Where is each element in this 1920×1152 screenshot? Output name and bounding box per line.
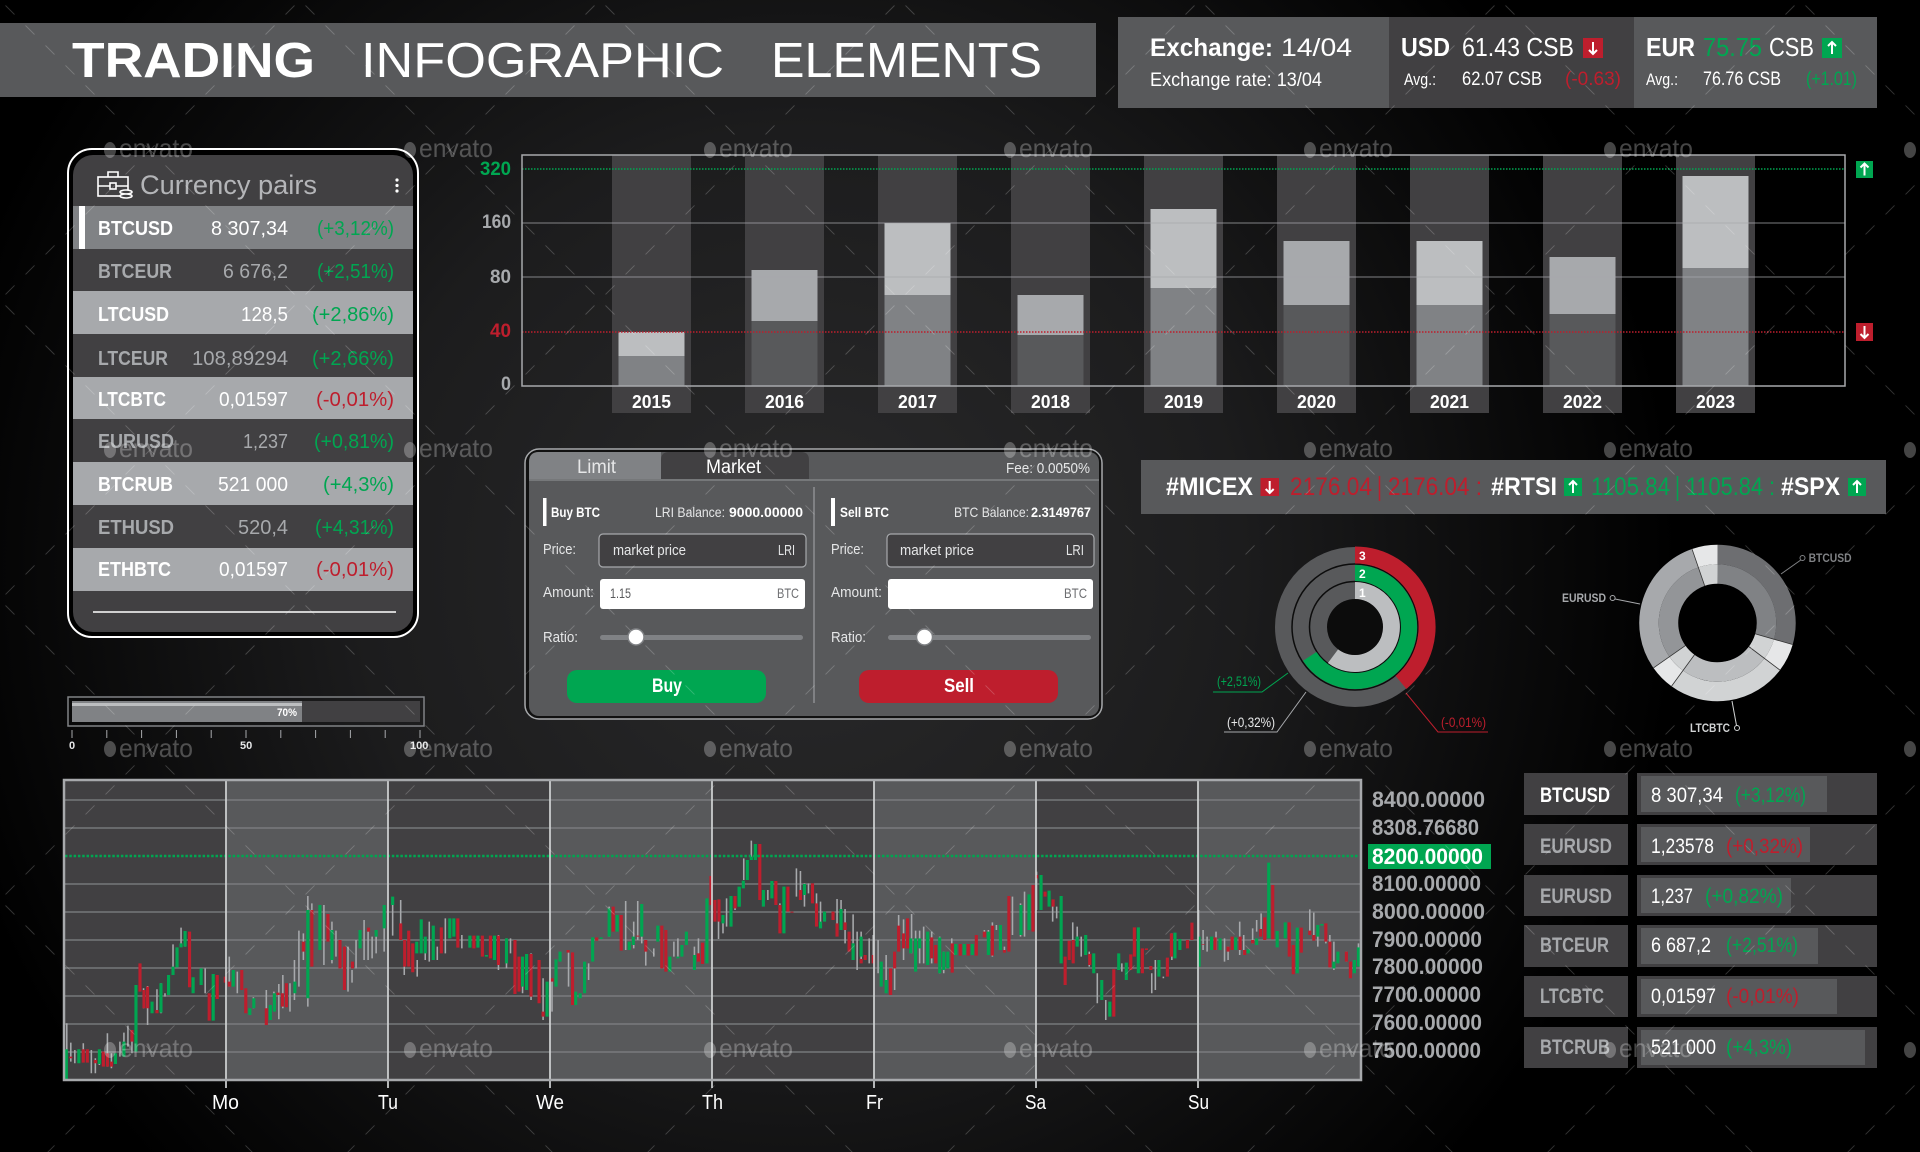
row: BTCEUR: BTCEUR [98, 261, 172, 283]
ring numbers: 2 [1359, 567, 1366, 581]
panel heading: Currency pairs [140, 170, 317, 200]
year labels: 2015 [632, 392, 671, 412]
tab: Market [661, 452, 809, 479]
row: LTCEUR: (+2,66%) [312, 348, 394, 370]
row: LTCUSD: 128,5 [241, 304, 288, 326]
year labels: 2023 [1696, 392, 1735, 412]
title text: INFOGRAPHIC [361, 34, 724, 88]
quote: BTCEUR [1524, 925, 1877, 967]
row: LTCUSD [73, 291, 413, 334]
row: LTCEUR: 108,89294 [192, 348, 288, 370]
sell button [859, 670, 1058, 703]
panel: exchange rates [1118, 17, 1877, 108]
quote: BTCUSD: BTCUSD [1540, 784, 1610, 807]
day labels: Su [1188, 1092, 1209, 1114]
icon: up marker [1856, 161, 1873, 178]
sell form: market price [900, 542, 974, 559]
watermarks: envato: envato [1019, 733, 1093, 763]
day labels: Mo [212, 1092, 239, 1114]
row: BTCRUB: BTCRUB [98, 474, 173, 496]
ring 3: red arc [1355, 555, 1427, 682]
row: ETHBTC: 0,01597 [219, 559, 288, 581]
title text: TRADING [72, 34, 315, 88]
panel: currency pairs [68, 149, 418, 637]
bar chart: yearly values [480, 155, 1873, 413]
callout: +2,51% [1213, 673, 1288, 692]
panel: index ticker [1141, 460, 1886, 514]
quote: EURUSD: 1,23578 [1651, 835, 1714, 858]
quote: EURUSD second: (+0,82%) [1705, 885, 1783, 908]
watermarks: envato: envato [119, 433, 193, 463]
ring 1: grey arc [1333, 590, 1391, 663]
watermarks: envato: envato [419, 433, 493, 463]
row: BTCUSD: BTCUSD [98, 218, 173, 240]
row: ETHBTC [73, 548, 413, 591]
progress bar: 0 [69, 740, 75, 752]
label: LTCBTC [1690, 701, 1740, 735]
day labels: Tu [378, 1092, 398, 1114]
row: LTCBTC [73, 377, 413, 419]
row: BTCRUB: 521 000 [218, 474, 288, 496]
quote: BTCEUR: BTCEUR [1540, 934, 1609, 957]
buy form: Buy BTC [551, 504, 600, 520]
axis labels: 0 [501, 374, 511, 395]
ring numbers [1359, 549, 1366, 600]
sell form: 2.3149767 [1031, 504, 1091, 520]
sell form: Ratio: [831, 629, 866, 646]
progress bar [68, 697, 428, 752]
day labels: Fr [866, 1092, 883, 1114]
progress bar: 50 [240, 740, 252, 752]
callout: +0,32%: (+0,32%) [1227, 714, 1275, 730]
buy form [543, 498, 806, 703]
row: EURUSD: EURUSD [98, 431, 174, 453]
tab: Market: Market [706, 457, 762, 478]
exchange date: Exchange rate: 13/04 [1150, 70, 1322, 91]
quote: BTCRUB: BTCRUB [1540, 1036, 1610, 1059]
USD quote: Avg.: [1404, 70, 1436, 89]
watermarks: envato: envato [1319, 433, 1393, 463]
watermarks: envato: envato [719, 433, 793, 463]
chart: segmented donut [1562, 549, 1852, 735]
title banner [0, 23, 1096, 97]
EUR quote: (+1.01) [1806, 69, 1857, 90]
label: BTCUSD: BTCUSD [1809, 551, 1852, 565]
year labels: 2019 [1164, 392, 1203, 412]
EUR quote: 75.75 [1703, 32, 1762, 62]
exchange date [1150, 34, 1352, 91]
buy button: Buy [652, 676, 682, 697]
progress bar: 100 [410, 740, 428, 752]
buy form: 9000.00000 [729, 504, 803, 520]
sell form: Price: [831, 541, 864, 558]
quote: LTCBTC: (-0,01%) [1726, 985, 1799, 1008]
year labels: 2021 [1430, 392, 1469, 412]
panel: index ticker: #RTSI [1491, 473, 1557, 501]
callout: +2,51%: (+2,51%) [1217, 673, 1261, 689]
quote: LTCBTC: 0,01597 [1651, 985, 1716, 1008]
row: EURUSD: (+0,81%) [314, 431, 394, 453]
watermarks: envato: envato [719, 1033, 793, 1063]
quote: LTCBTC [1524, 976, 1877, 1017]
price axis: 8400.00000 [1372, 787, 1485, 812]
icon: down marker [1856, 323, 1873, 341]
row: BTCUSD [73, 206, 413, 249]
watermarks: envato: envato [1019, 1033, 1093, 1063]
EUR quote: CSB [1769, 32, 1814, 62]
sell form: Sell BTC [840, 504, 889, 520]
sell button: Sell [944, 676, 974, 697]
price axis [1368, 787, 1491, 1063]
row: ETHUSD: 520,4 [238, 517, 288, 539]
axis labels: 40 [490, 321, 511, 342]
watermarks: envato: envato [119, 133, 193, 163]
day bands [64, 780, 1361, 1080]
year labels: 2018 [1031, 392, 1070, 412]
row: ETHUSD: ETHUSD [98, 517, 174, 539]
quote: EURUSD second: EURUSD [1540, 885, 1612, 908]
title text [72, 34, 1042, 88]
watermarks: envato: envato [419, 733, 493, 763]
panel: trade form [525, 449, 1102, 719]
title text: ELEMENTS [771, 34, 1042, 88]
panel: index ticker: 2176.04 [1290, 473, 1372, 501]
price axis: 7900.00000 [1372, 927, 1482, 952]
day labels: Sa [1025, 1092, 1047, 1114]
progress bar: 70% [277, 707, 297, 719]
quote: BTCEUR: 6 687,2 [1651, 934, 1711, 957]
callout: -0,01% [1406, 693, 1488, 732]
axis labels: 320 [480, 159, 511, 180]
sell form: BTC [1064, 585, 1087, 601]
row: LTCUSD: (+2,86%) [312, 304, 394, 326]
row: LTCEUR: LTCEUR [98, 348, 168, 370]
ring 2: green arc [1310, 573, 1409, 681]
quote: BTCUSD: (+3,12%) [1735, 784, 1806, 807]
sell form [831, 498, 1094, 703]
quote: BTCUSD [1524, 773, 1877, 815]
panel: index ticker: #MICEX [1166, 473, 1253, 501]
quote: EURUSD second: 1,237 [1651, 885, 1693, 908]
watermarks: envato [104, 133, 1916, 1063]
chart: concentric ring gauge [1213, 547, 1488, 732]
candles: second half of the week [739, 841, 1358, 1020]
stacked bars [618, 176, 1748, 386]
row: EURUSD [98, 431, 394, 453]
row: BTCEUR: 6 676,2 [223, 261, 288, 283]
watermarks: envato: envato [1619, 733, 1693, 763]
ring numbers: 1 [1359, 586, 1366, 600]
buy form: LRI [778, 542, 795, 559]
buy button [567, 670, 766, 703]
watermarks: envato: envato [1019, 133, 1093, 163]
chart: candlestick price chart [64, 780, 1491, 1114]
USD quote: 61.43 CSB [1462, 32, 1574, 62]
watermarks: envato: envato [419, 1033, 493, 1063]
price axis: 7700.00000 [1372, 982, 1481, 1007]
EUR quote [1646, 32, 1857, 90]
callout: +0,32% [1224, 692, 1306, 732]
price axis: 7600.00000 [1372, 1010, 1482, 1035]
day labels [212, 1092, 1209, 1114]
USD quote: USD [1401, 32, 1450, 62]
ring numbers: 3 [1359, 549, 1366, 563]
label: EURUSD [1562, 591, 1640, 605]
axis labels: 160 [482, 212, 511, 233]
icon: briefcase with coins [98, 172, 132, 198]
label: BTCUSD [1781, 551, 1852, 574]
quote: EURUSD: (+0,32%) [1726, 835, 1803, 858]
row: LTCBTC: LTCBTC [98, 389, 166, 411]
tab: Limit [529, 452, 661, 479]
EUR quote: 76.76 CSB [1703, 69, 1781, 90]
price axis: 8100.00000 [1372, 871, 1481, 896]
sell form: Amount: [831, 584, 882, 601]
label: EURUSD: EURUSD [1562, 591, 1606, 605]
EUR quote: EUR [1646, 32, 1695, 62]
year labels [632, 392, 1735, 412]
row: BTCEUR: (+2,51%) [317, 261, 394, 283]
exchange date: 14/04 [1281, 34, 1352, 62]
quote: EURUSD: EURUSD [1540, 835, 1612, 858]
exchange date: Exchange: [1150, 34, 1273, 62]
watermarks: envato: envato [1619, 133, 1693, 163]
USD quote [1401, 32, 1621, 90]
row: ETHBTC: (-0,01%) [316, 559, 394, 581]
buy form: market price [613, 542, 686, 559]
buy form: Amount: [543, 584, 594, 601]
USD quote: 62.07 CSB [1462, 69, 1542, 90]
panel: index ticker: 1105.84 : [1686, 473, 1775, 501]
panel: index ticker: 2176.04 : [1388, 473, 1482, 501]
row: LTCBTC: (-0,01%) [316, 389, 394, 411]
axis labels [480, 159, 511, 395]
fee: Fee: 0.0050% [1006, 460, 1090, 477]
axis labels: 80 [490, 267, 511, 288]
watermarks: envato: envato [419, 133, 493, 163]
label: LTCBTC: LTCBTC [1690, 721, 1730, 735]
panel: index ticker: 1105.84 [1591, 473, 1670, 501]
row: EURUSD: 1,237 [243, 431, 288, 453]
row: ETHUSD: (+4,31%) [315, 517, 394, 539]
buy form: LRI Balance: [655, 504, 725, 520]
price axis: 7500.00000 [1372, 1038, 1481, 1063]
quote: BTCRUB: (+4,3%) [1726, 1036, 1792, 1059]
sell form: BTC Balance: [954, 504, 1029, 520]
row: BTCUSD: 8 307,34 [211, 218, 288, 240]
row: ETHUSD [98, 517, 394, 539]
price axis: 8200.00000 [1372, 844, 1483, 869]
day labels: We [536, 1092, 564, 1114]
buy form: BTC [777, 585, 799, 601]
buy form: Ratio: [543, 629, 578, 646]
row: ETHBTC: ETHBTC [98, 559, 171, 581]
watermarks: envato: envato [1619, 1033, 1693, 1063]
watermarks: envato: envato [1319, 733, 1393, 763]
watermarks: envato: envato [119, 1033, 193, 1063]
sell form: LRI [1066, 542, 1084, 559]
chart columns [612, 155, 1755, 413]
quote: BTCRUB [1524, 1027, 1877, 1068]
price axis: 7800.00000 [1372, 954, 1483, 979]
year labels: 2016 [765, 392, 804, 412]
EUR quote: Avg.: [1646, 70, 1678, 89]
year labels: 2017 [898, 392, 937, 412]
row: BTCUSD: (+3,12%) [317, 218, 394, 240]
row: LTCUSD: LTCUSD [98, 304, 169, 326]
row: LTCBTC: 0,01597 [219, 389, 288, 411]
callout: -0,01%: (-0,01%) [1441, 714, 1486, 730]
watermarks: envato: envato [1019, 433, 1093, 463]
watermarks: envato: envato [1319, 133, 1393, 163]
buy form: 1.15 [610, 585, 631, 601]
watermarks: envato: envato [119, 733, 193, 763]
year labels: 2020 [1297, 392, 1336, 412]
tab: Limit: Limit [577, 457, 617, 478]
quote: EURUSD second [1524, 875, 1877, 916]
price axis: 8000.00000 [1372, 899, 1485, 924]
day labels: Th [702, 1092, 723, 1114]
candles: first half of the week [66, 876, 739, 1079]
buy form: Price: [543, 541, 576, 558]
panel: quote table [1524, 773, 1877, 1068]
watermarks: envato: envato [1619, 433, 1693, 463]
row: BTCRUB [73, 462, 413, 505]
row: LTCEUR [98, 348, 394, 370]
quote: LTCBTC: LTCBTC [1540, 985, 1604, 1008]
row: BTCEUR [98, 261, 394, 283]
year labels: 2022 [1563, 392, 1602, 412]
row: BTCRUB: (+4,3%) [323, 474, 394, 496]
quote: EURUSD [1524, 824, 1877, 865]
quote: BTCRUB: 521 000 [1651, 1036, 1716, 1059]
quote: BTCUSD: 8 307,34 [1651, 784, 1723, 807]
quote: BTCEUR: (+2,51%) [1726, 934, 1798, 957]
watermarks: envato: envato [719, 733, 793, 763]
panel: index ticker: #SPX [1781, 473, 1840, 501]
price axis: 8308.76680 [1372, 815, 1479, 840]
watermarks: envato: envato [719, 133, 793, 163]
watermarks: envato: envato [1319, 1033, 1393, 1063]
USD quote: (-0.63) [1565, 69, 1621, 90]
icon: menu dots [395, 178, 399, 193]
